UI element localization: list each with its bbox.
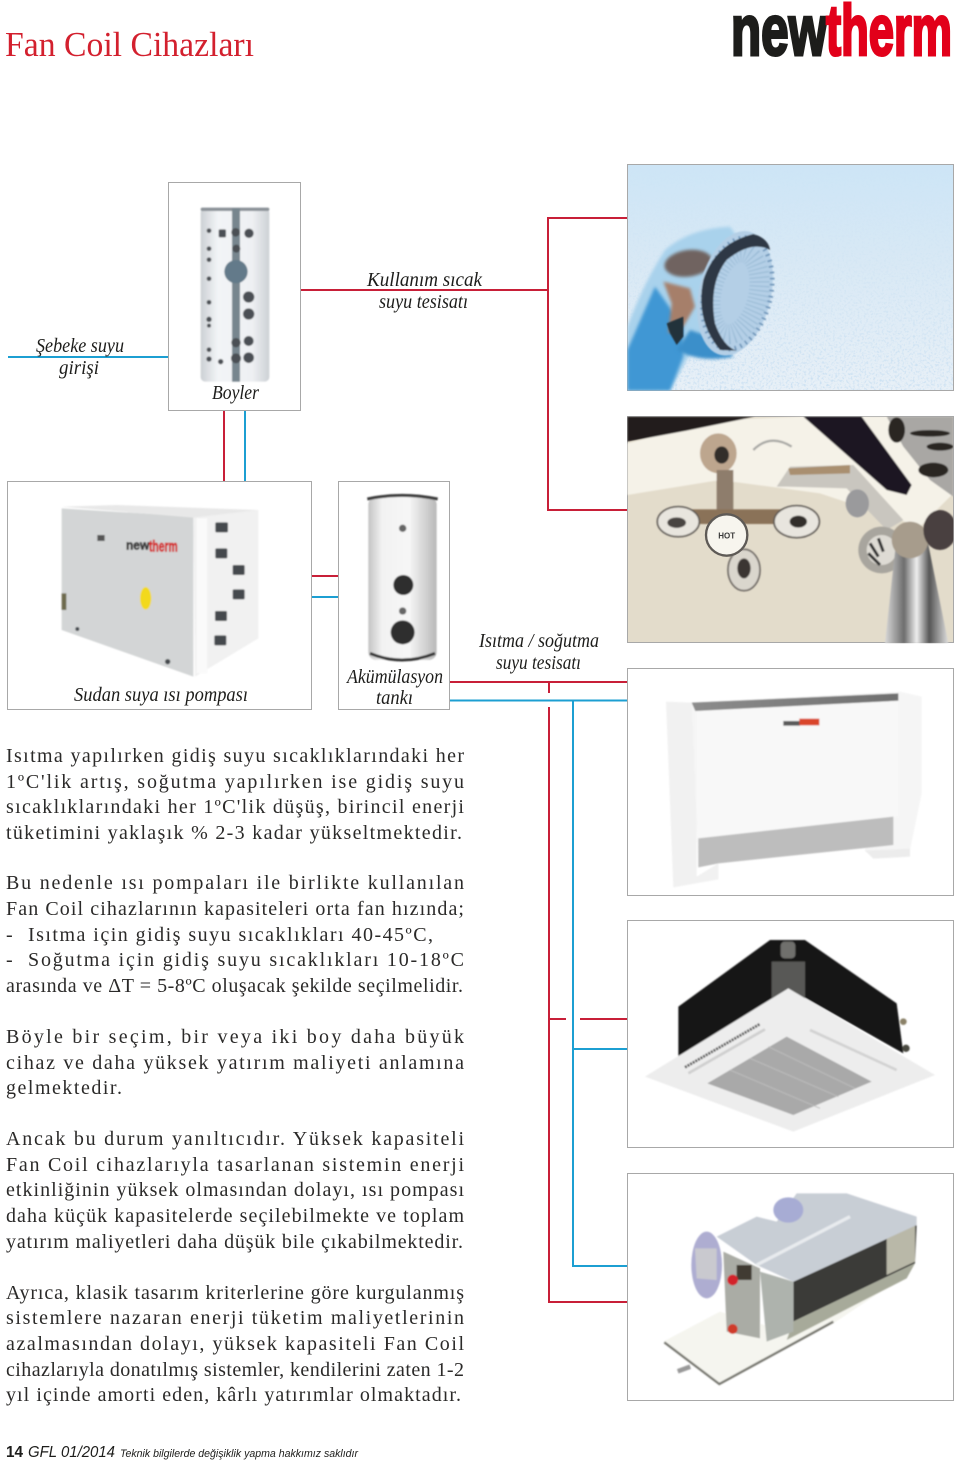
footer: Teknik bilgilerde değişiklik yapma hakkımız saklıdır	[120, 1448, 359, 1460]
text block: paragraph 4: Fan Coil cihazlarıyla tasarlanan sistemin enerji	[6, 1154, 464, 1176]
label: Akümülasyon tankı: tankı	[376, 687, 413, 709]
text block: paragraph 5: yıl içinde amorti eden, kârlı yatırımlar olmaktadır.	[6, 1384, 461, 1406]
panel: Boyler	[168, 182, 300, 410]
text block: paragraph 4: daha küçük kapasitelerde seçilebilmekte ve toplam	[6, 1205, 464, 1227]
title: Fan Coil Cihazları	[5, 25, 254, 64]
text block: paragraph 3: cihaz ve daha yüksek yatırım maliyeti anlamına	[6, 1052, 464, 1074]
text block: paragraph 1	[6, 745, 464, 844]
text block: paragraph 5: sistemlere nazaran enerji tüketim maliyetlerinin	[6, 1307, 464, 1329]
label: Kullanım sıcak suyu tesisatı	[366, 269, 483, 313]
icon: floor fan coil unit	[666, 692, 922, 887]
text block: paragraph 5: cihazlarıyla donatılmış sistemler, kendilerini zaten 1-2	[6, 1359, 464, 1381]
cold water connection lines	[8, 357, 627, 1266]
text block: paragraph 5: azalmasından dolayı, yüksek kapasiteli Fan Coil	[6, 1333, 464, 1355]
icon: ceiling cassette unit	[645, 940, 935, 1132]
text block: paragraph 2: Fan Coil cihazlarının kapasiteleri orta fan hızında;	[6, 898, 464, 920]
panel: Akümülasyon tankı	[338, 482, 450, 710]
label: Isıtma / soğutma suyu tesisatı	[478, 630, 599, 674]
label: Isıtma / soğutma suyu tesisatı: suyu tesisatı	[496, 652, 581, 674]
footer: 14	[6, 1444, 23, 1461]
footer	[6, 1444, 359, 1461]
text block: paragraph 4: yatırım maliyetleri daha düşük bile çıkabilmektedir.	[6, 1231, 463, 1253]
text block: paragraph 5: Ayrıca, klasik tasarım kriterlerine göre kurgulanmış	[6, 1282, 464, 1304]
panel: Sudan suya ısı pompası	[8, 482, 312, 710]
label: Şebeke suyu girişi: girişi	[59, 357, 99, 379]
icon: heat pump: new	[126, 539, 149, 553]
panel: floor fan coil	[628, 668, 954, 896]
text block: paragraph 5	[6, 1282, 464, 1406]
label: Şebeke suyu girişi	[36, 335, 124, 379]
text block: paragraph 4: etkinliğinin yüksek olmasından dolayı, ısı pompası	[6, 1179, 464, 1201]
label: Isıtma / soğutma suyu tesisatı: Isıtma / soğutma	[478, 630, 599, 652]
label: Akümülasyon tankı	[345, 666, 443, 709]
text block: paragraph 1: 1ºC'lik artış, soğutma yapılırken ise gidiş suyu	[6, 771, 464, 793]
icon: ducted unit	[663, 1193, 917, 1384]
icon: boiler tank	[201, 208, 269, 382]
icon: heat pump: therm	[149, 539, 178, 556]
icon: accumulation tank	[367, 495, 438, 660]
text block: paragraph 2: Soğutma için gidiş suyu sıcaklıkları 10-18ºC	[28, 949, 464, 971]
logo: newtherm	[731, 0, 952, 71]
hot water connection lines	[224, 218, 627, 1302]
label: Şebeke suyu girişi: Şebeke suyu	[36, 335, 124, 357]
label: Akümülasyon tankı: Akümülasyon	[345, 666, 443, 688]
label: Kullanım sıcak suyu tesisatı: Kullanım sıcak	[366, 269, 483, 291]
text block: paragraph 3	[6, 1026, 464, 1099]
photo: shower head	[627, 164, 954, 391]
label: Kullanım sıcak suyu tesisatı: suyu tesisatı	[379, 291, 468, 313]
text block: paragraph 2: -	[6, 924, 13, 946]
text block: paragraph 1: sıcaklıklarındaki her 1ºC'lik düşüş, birincil enerji	[6, 796, 464, 818]
text block: paragraph 2: -	[6, 949, 13, 971]
text block: paragraph 1: Isıtma yapılırken gidiş suyu sıcaklıklarındaki her	[6, 745, 464, 767]
text block: paragraph 3: gelmektedir.	[6, 1077, 122, 1099]
panel: ducted fan coil	[628, 1174, 954, 1400]
panel: cassette fan coil	[628, 920, 954, 1148]
photo: chrome faucet: HOT	[718, 531, 735, 540]
footer: GFL 01/2014	[28, 1444, 115, 1461]
text block: paragraph 2: arasında ve ΔT = 5-8ºC oluşacak şekilde seçilmelidir.	[6, 975, 463, 997]
text block: paragraph 1: tüketimini yaklaşık % 2-3 kadar yükseltmektedir.	[6, 822, 462, 844]
photo: chrome faucet	[627, 416, 957, 643]
label: Boyler: Boyler	[212, 382, 259, 404]
text block: paragraph 4	[6, 1128, 464, 1253]
label: Sudan suya ısı pompası: Sudan suya ısı pompası	[74, 684, 248, 706]
icon: heat pump	[62, 505, 258, 677]
text block: paragraph 2	[6, 872, 464, 997]
text block: paragraph 4: Ancak bu durum yanıltıcıdır. Yüksek kapasiteli	[6, 1128, 464, 1150]
text block: paragraph 2: Bu nedenle ısı pompaları ile birlikte kullanılan	[6, 872, 464, 894]
text block: paragraph 3: Böyle bir seçim, bir veya iki boy daha büyük	[6, 1026, 464, 1048]
text block: paragraph 2: Isıtma için gidiş suyu sıcaklıkları 40-45ºC,	[28, 924, 433, 946]
